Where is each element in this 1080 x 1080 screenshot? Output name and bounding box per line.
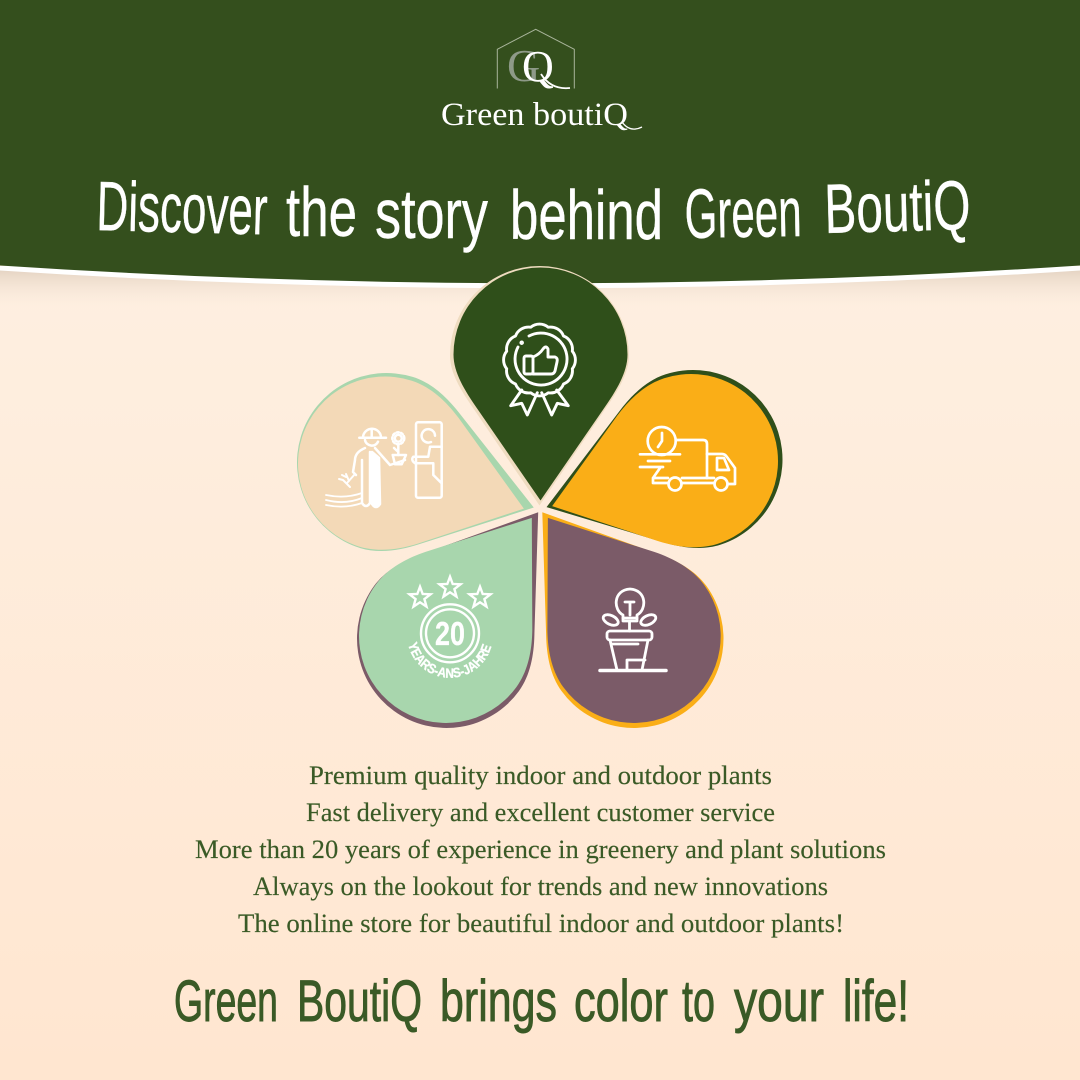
benefits list: More than 20 years of experience in greenery and plant solutions [195,835,886,864]
logo: Green boutiQ [441,29,642,133]
closing slogan: brings [440,969,557,1034]
logo: Green boutiQ: Green boutiQ [441,97,628,133]
closing slogan: life! [843,969,909,1034]
petal: lower right, innovation [470,460,759,764]
title: the [286,173,357,251]
icon: 20 years badge with stars [406,574,494,678]
icon: light bulb plant pot [600,589,666,670]
icon: delivery truck with clock [640,427,735,490]
icon: 20 years badge with stars: 20 [435,615,465,652]
title: behind [510,176,663,254]
title: story [375,175,488,253]
icon: gardener and customer at door [326,422,442,507]
petal: left, gardener service [275,351,560,593]
petal: lower left, 20 years [357,512,538,728]
closing slogan: color [574,969,668,1034]
header band [0,0,1080,312]
title: Green [684,173,802,253]
benefits list [195,761,886,938]
logo: Green boutiQ: Q [522,42,554,91]
title: BoutiQ [823,166,971,248]
closing slogan [174,969,909,1034]
icon: 20 years badge with stars: YEARS-ANS-JAHRE [408,641,492,678]
benefits list: The online store for beautiful indoor and outdoor plants! [238,909,844,938]
title [96,166,971,254]
closing slogan: Green [174,969,278,1034]
benefits list: Fast delivery and excellent customer service [306,798,775,827]
title: Discover [96,167,269,249]
petal: right, fast delivery [519,347,806,592]
closing slogan: your [734,969,824,1034]
logo: Green boutiQ: G [507,40,540,91]
closing slogan: BoutiQ [297,969,422,1034]
closing slogan: to [682,969,715,1034]
benefits list: Premium quality indoor and outdoor plants [309,761,772,790]
icon: award rosette with thumbs up [504,324,575,415]
benefits list: Always on the lookout for trends and new innovations [253,872,828,901]
petal: top, quality award [450,266,629,506]
